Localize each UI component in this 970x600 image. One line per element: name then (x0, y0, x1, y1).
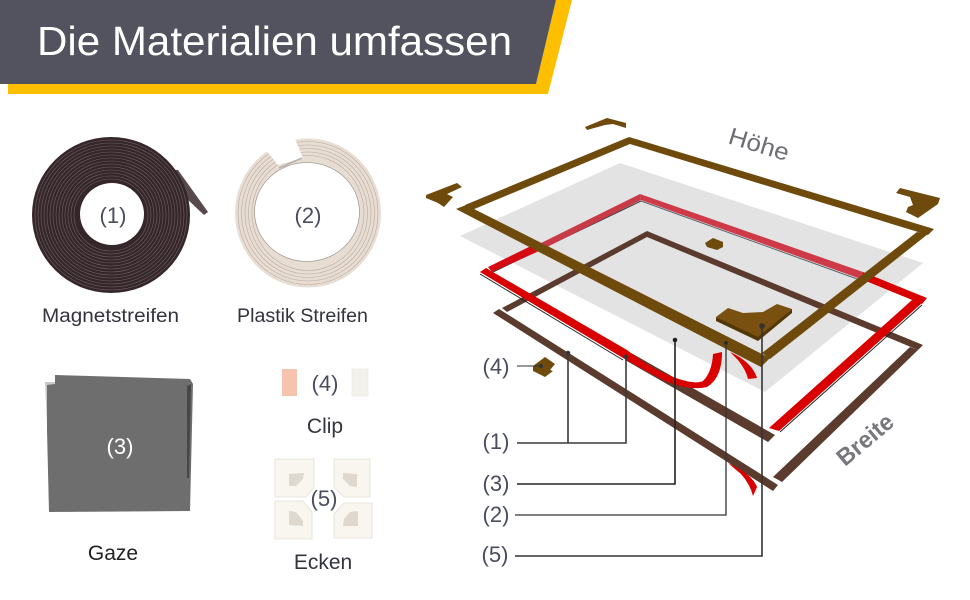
label: (4) clip: (4) (312, 371, 338, 396)
icon: folded gauze (45, 375, 193, 512)
label: Höhe: Höhe (725, 123, 792, 167)
icon: right corner piece (896, 188, 940, 218)
caption: Ecken: Ecken (294, 551, 352, 574)
caption: Magnetstreifen: Magnetstreifen (42, 306, 179, 327)
icon: pink clip (282, 369, 297, 396)
icon: plastic strip coil (235, 130, 381, 288)
callout: (3): (3) (483, 471, 509, 496)
mesh sheet (460, 163, 923, 392)
callout: (5) (482, 324, 764, 567)
panel: clip (282, 369, 368, 438)
label: Breite: Breite (832, 408, 899, 472)
label: (5) corners: (5) (311, 486, 337, 511)
top brown frame (456, 137, 934, 367)
callout: (1) (483, 352, 628, 454)
label: (2) on coil: (2) (295, 203, 321, 228)
icon: left corner piece (426, 183, 462, 207)
caption: Clip: Clip (307, 415, 343, 438)
callout: (1): (1) (483, 429, 509, 454)
lower dark brown frame (493, 231, 923, 491)
title: Die Materialien umfassen (37, 18, 512, 64)
callout: (4): (4) (483, 354, 509, 379)
icon: loose clip (4) (533, 357, 555, 377)
icon: magnetic strip coil (32, 137, 208, 293)
red magnetic strip frame (480, 194, 927, 496)
label: (3) on gauze: (3) (107, 434, 133, 459)
callout: (2): (2) (483, 502, 509, 527)
icon: centre clip piece (705, 238, 723, 250)
panel: plastic strip (235, 130, 381, 327)
icon: white clip (352, 369, 368, 396)
icon: top corner piece (585, 118, 626, 130)
exploded diagram of the frame (426, 118, 940, 496)
panel: corners (275, 459, 372, 574)
header banner (0, 0, 572, 94)
callouts (482, 324, 764, 567)
callout: (2) (483, 342, 728, 527)
icon: four white corner pieces (275, 459, 372, 539)
callout: (5): (5) (482, 542, 508, 567)
panel: mesh gauze (45, 375, 193, 565)
caption: Plastik Streifen: Plastik Streifen (237, 306, 368, 327)
caption: Gaze: Gaze (88, 542, 138, 565)
callout: (3) (483, 338, 676, 496)
callout: (4) (483, 354, 543, 379)
panel: magnetic strip (32, 137, 208, 327)
icon: front corner piece (716, 304, 792, 341)
label: (1) on coil: (1) (100, 203, 126, 228)
